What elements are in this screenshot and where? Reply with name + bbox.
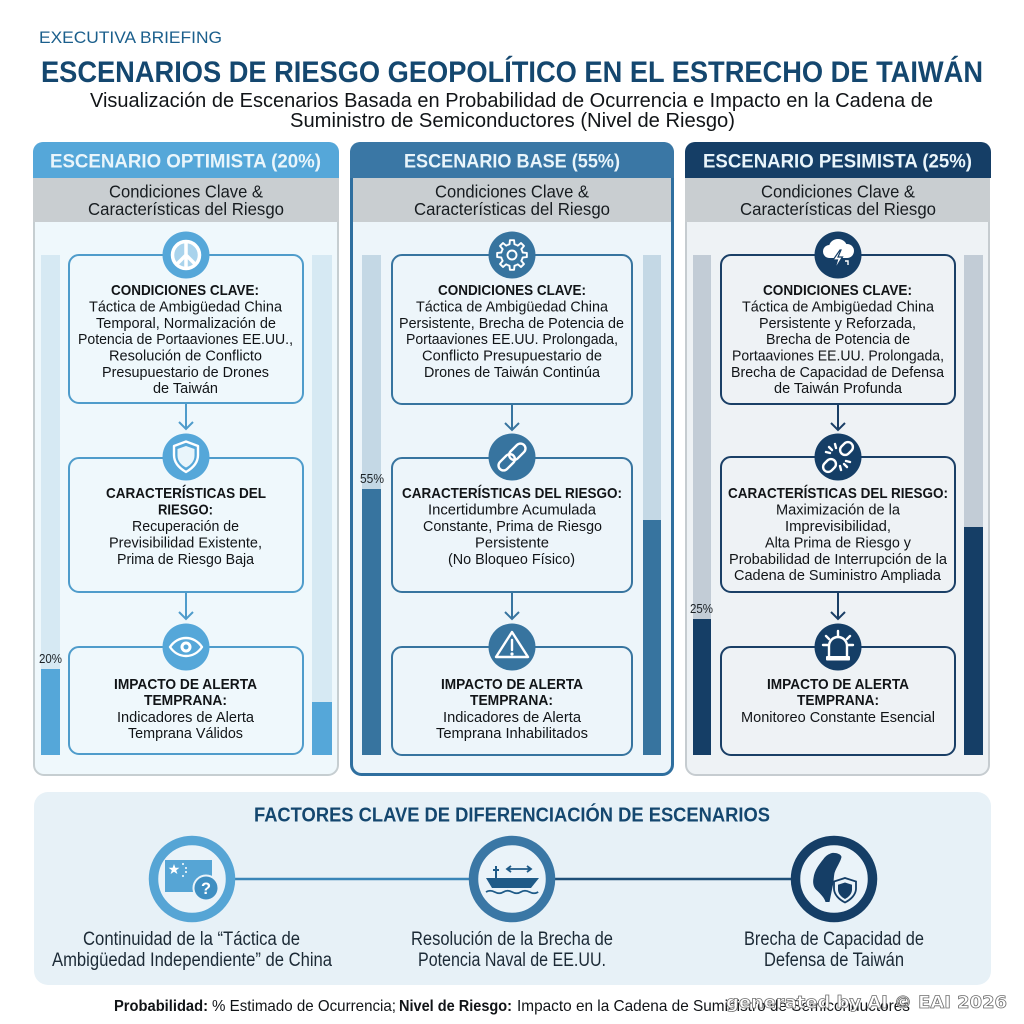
- icon: alarm beacon: [814, 624, 862, 670]
- icon: warning triangle: [488, 624, 536, 670]
- panel: escenario base: [350, 142, 674, 774]
- footnote: Nivel de Riesgo:: [399, 998, 512, 1015]
- probability bar: 25%: 25%: [690, 602, 713, 616]
- header: pesimista: [685, 142, 991, 178]
- connector line: [554, 878, 792, 880]
- risk bar: pesimista: [964, 255, 983, 755]
- arrow: [831, 592, 845, 619]
- card: impacto optimista: IMPACTO DE ALERTA: [114, 676, 257, 693]
- card: condiciones clave base: Conflicto Presupuestario de: [422, 348, 602, 364]
- card: condiciones clave pesimista: Brecha de Capacidad de Defensa: [731, 364, 945, 381]
- card: impacto base: Indicadores de Alerta: [443, 709, 582, 726]
- card: características pesimista: Maximización de la: [776, 502, 901, 518]
- card: características base: (No Bloqueo Físico): [448, 551, 575, 568]
- card: impacto pesimista: TEMPRANA:: [797, 692, 879, 709]
- footnote: % Estimado de Ocurrencia;: [212, 998, 396, 1015]
- header: base: [350, 142, 674, 178]
- card: condiciones clave base: Portaaviones EE.UU. Prolongada,: [406, 331, 618, 348]
- card: condiciones clave pesimista: [721, 255, 955, 404]
- card: condiciones clave optimista: [69, 255, 303, 403]
- arrow: [505, 592, 519, 619]
- subtitle: Visualización de Escenarios Basada en Probabilidad de Ocurrencia e Impacto en la Cadena de: [90, 89, 933, 112]
- header: pesimista: ESCENARIO PESIMISTA (25%): [703, 150, 972, 172]
- card: condiciones clave pesimista: Persistente y Reforzada,: [759, 315, 916, 332]
- card: impacto base: TEMPRANA:: [470, 692, 553, 709]
- factor: china: ?: [201, 879, 211, 898]
- card: características pesimista: Alta Prima de Riesgo y: [765, 534, 911, 552]
- subheader: base: [353, 178, 671, 222]
- card: condiciones clave optimista: Resolución de Conflicto: [109, 348, 262, 364]
- factor: naval: Resolución de la Brecha de: [411, 929, 613, 950]
- card: condiciones clave optimista: Potencia de Portaaviones EE.UU.,: [78, 331, 293, 348]
- card: características pesimista: Imprevisibilidad,: [785, 518, 891, 535]
- card: características optimista: RIESGO:: [158, 502, 213, 518]
- factor: taiwan defense: Brecha de Capacidad de: [744, 929, 924, 950]
- probability bar: 25%: [690, 255, 713, 755]
- card: impacto base: Temprana Inhabilitados: [436, 725, 588, 742]
- panel: escenario pesimista: [685, 142, 991, 775]
- factor: taiwan defense: Defensa de Taiwán: [764, 950, 904, 971]
- card: impacto optimista: Temprana Válidos: [128, 725, 243, 742]
- icon: broken chain: [814, 434, 862, 480]
- card: características base: Incertidumbre Acumulada: [428, 502, 597, 518]
- card: impacto base: IMPACTO DE ALERTA: [441, 676, 583, 693]
- card: características pesimista: CARACTERÍSTICAS DEL RIESGO:: [728, 485, 948, 502]
- card: condiciones clave pesimista: de Taiwán Profunda: [774, 380, 903, 397]
- card: condiciones clave optimista: Táctica de Ambigüedad China: [89, 298, 283, 316]
- header: optimista: ESCENARIO OPTIMISTA (20%): [50, 150, 321, 172]
- footnote: Impacto en la Cadena de Suministro de Semiconductores: [517, 998, 910, 1015]
- card: características base: Persistente: [475, 534, 549, 552]
- eyebrow label: EXECUTIVA BRIEFING: [39, 28, 222, 47]
- card: características base: [392, 458, 632, 592]
- arrow: [179, 403, 193, 429]
- card: condiciones clave pesimista: Brecha de Potencia de: [766, 331, 910, 348]
- card: condiciones clave base: Drones de Taiwán Continúa: [424, 364, 601, 381]
- subheader: pesimista: Características del Riesgo: [740, 199, 936, 219]
- card: características optimista: CARACTERÍSTICAS DEL: [106, 485, 266, 502]
- factor: china: [52, 840, 332, 971]
- factor: naval: [411, 840, 613, 971]
- probability bar: 20%: 20%: [39, 652, 62, 666]
- probability bar: 20%: [39, 255, 62, 755]
- card: características optimista: Recuperación de: [132, 518, 239, 535]
- card: condiciones clave base: CONDICIONES CLAVE:: [438, 282, 586, 299]
- icon: chain link: [488, 434, 536, 480]
- card: características optimista: Previsibilidad Existente,: [109, 534, 262, 552]
- factor: taiwan defense: [744, 840, 924, 971]
- footnote: Probabilidad:: [114, 998, 208, 1015]
- card: condiciones clave optimista: Temporal, Normalización de: [96, 315, 276, 332]
- connector line: [235, 878, 470, 880]
- header: optimista: [33, 142, 339, 178]
- factor: naval: Potencia Naval de EE.UU.: [418, 950, 606, 971]
- probability bar: 55%: [360, 255, 384, 755]
- panel: escenario optimista: [33, 142, 339, 775]
- card: condiciones clave pesimista: Táctica de Ambigüedad China: [742, 298, 935, 316]
- card: características base: Constante, Prima de Riesgo: [423, 518, 602, 535]
- footnote: [114, 998, 910, 1015]
- factor: china: Ambigüedad Independiente” de China: [52, 950, 332, 971]
- header: base: ESCENARIO BASE (55%): [404, 150, 620, 172]
- risk bar: optimista: [312, 255, 332, 755]
- card: condiciones clave pesimista: Portaaviones EE.UU. Prolongada,: [732, 348, 944, 364]
- card: impacto optimista: TEMPRANA:: [144, 692, 227, 709]
- icon: shield: [162, 434, 210, 480]
- card: características optimista: Prima de Riesgo Baja: [117, 551, 255, 568]
- subtitle: Suministro de Semiconductores (Nivel de Riesgo): [290, 109, 735, 132]
- subheader: optimista: Condiciones Clave &: [109, 182, 263, 202]
- card: impacto base: [392, 647, 632, 755]
- heading: factores clave: FACTORES CLAVE DE DIFERENCIACIÓN DE ESCENARIOS: [254, 802, 770, 826]
- card: impacto pesimista: Monitoreo Constante Esencial: [741, 709, 935, 726]
- card: condiciones clave optimista: Presupuestario de Drones: [102, 364, 269, 381]
- watermark: generated by AI © EAI 2026: [726, 993, 1007, 1013]
- subheader: base: Condiciones Clave &: [435, 182, 589, 202]
- card: características optimista: [69, 458, 303, 592]
- card: impacto pesimista: [721, 647, 955, 755]
- arrow: [179, 592, 193, 619]
- card: impacto optimista: [69, 647, 303, 754]
- card: características pesimista: [721, 457, 955, 592]
- factor: china: Continuidad de la “Táctica de: [83, 929, 300, 950]
- subheader: pesimista: [685, 178, 990, 222]
- probability bar: 55%: 55%: [360, 472, 384, 486]
- card: características base: CARACTERÍSTICAS DEL RIESGO:: [402, 485, 622, 502]
- card: características pesimista: Probabilidad de Interrupción de la: [729, 551, 948, 568]
- arrow: [831, 404, 845, 430]
- card: condiciones clave base: [392, 255, 632, 404]
- card: impacto optimista: Indicadores de Alerta: [117, 709, 255, 726]
- icon: peace: [162, 232, 210, 278]
- icon: gear: [488, 232, 536, 278]
- icon: storm cloud: [814, 232, 862, 278]
- subheader: base: Características del Riesgo: [414, 199, 610, 219]
- subheader: optimista: Características del Riesgo: [88, 199, 284, 219]
- card: condiciones clave pesimista: CONDICIONES CLAVE:: [763, 282, 912, 299]
- panel: factores clave: [34, 792, 991, 985]
- card: características pesimista: Cadena de Suministro Ampliada: [734, 567, 942, 584]
- card: condiciones clave base: Persistente, Brecha de Potencia de: [399, 315, 624, 332]
- subheader: pesimista: Condiciones Clave &: [761, 182, 915, 202]
- card: condiciones clave optimista: CONDICIONES CLAVE:: [111, 282, 259, 299]
- card: condiciones clave optimista: de Taiwán: [153, 380, 218, 397]
- card: condiciones clave base: Táctica de Ambigüedad China: [416, 298, 609, 316]
- icon: eye: [162, 624, 210, 670]
- arrow: [505, 404, 519, 430]
- card: impacto pesimista: IMPACTO DE ALERTA: [767, 676, 909, 693]
- risk bar: base: [643, 255, 661, 755]
- subtitle: [90, 89, 933, 132]
- subheader: optimista: [33, 178, 339, 222]
